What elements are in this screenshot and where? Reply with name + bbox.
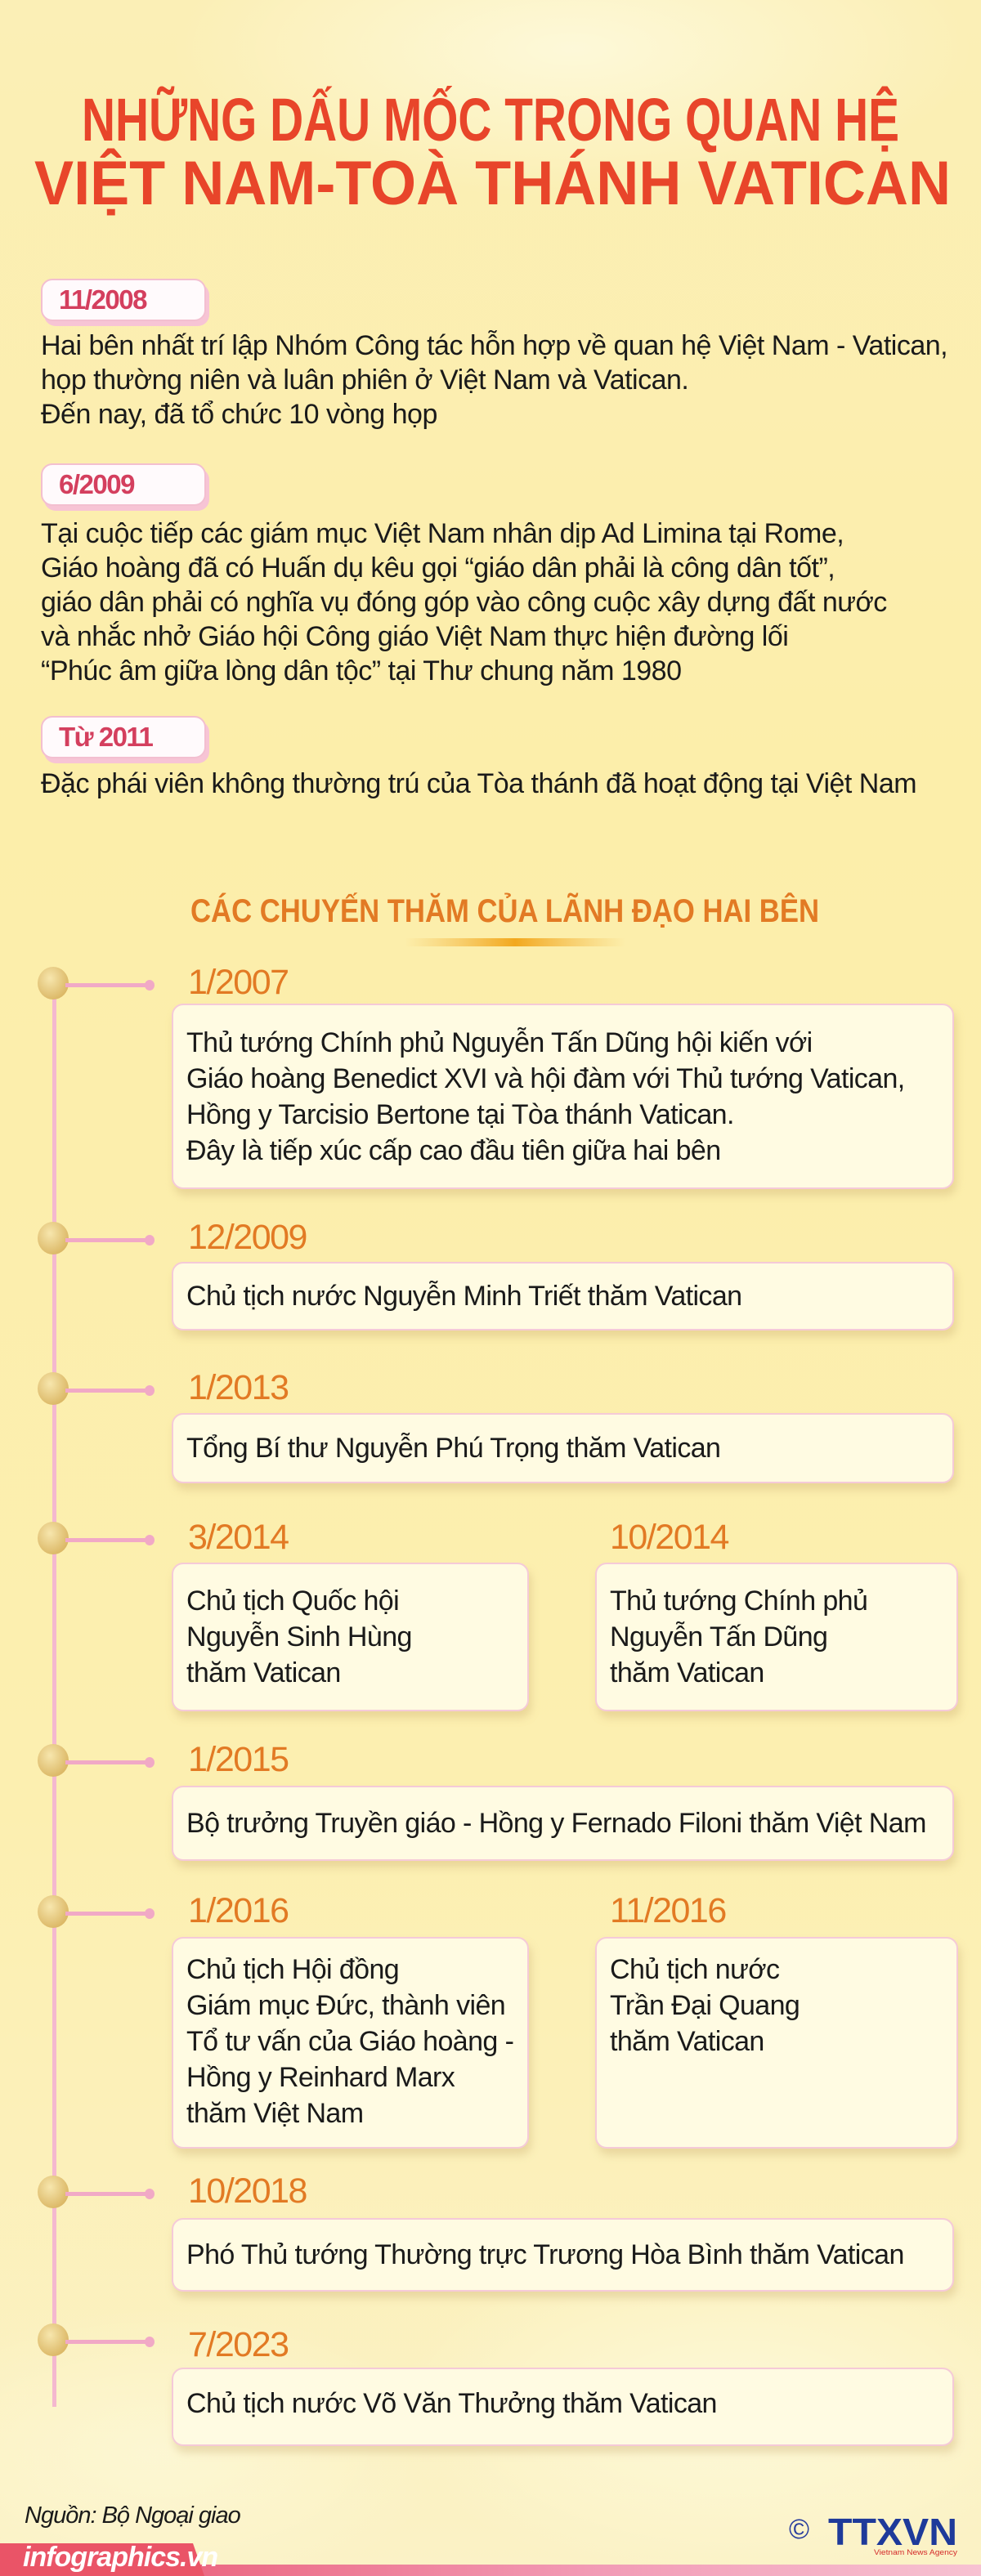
item: 7/2023: Chủ tịch nước Võ Văn Thưởng thăm Vatican [186,2388,717,2419]
item: 1/2007 [38,963,958,1198]
item: 7/2023: 7/2023 [188,2325,289,2364]
heading: visits: CÁC CHUYẾN THĂM CỦA LÃNH ĐẠO HAI BÊN [190,892,819,929]
timeline line [52,985,56,2407]
item: 1/2016 and 11/2016: Giám mục Đức, thành viên [186,1990,505,2021]
text: 11/2008 [41,330,947,430]
text: 6/2009: giáo dân phải có nghĩa vụ đóng góp vào công cuộc xây dựng đất nước [41,587,887,618]
item: 12/2009 [38,1218,958,1339]
text: 11/2008: Hai bên nhất trí lập Nhóm Công tác hỗn hợp về quan hệ Việt Nam - Vatican, [41,330,947,361]
pill: 6/2009: 6/2009 [59,469,134,499]
item: 1/2015: Bộ trưởng Truyền giáo - Hồng y Fernado Filoni thăm Việt Nam [186,1808,926,1839]
item: 10/2018: 10/2018 [188,2171,307,2211]
item: 3/2014 and 10/2014: Thủ tướng Chính phủ [610,1585,867,1617]
text: 11/2008: họp thường niên và luân phiên ở Việt Nam và Vatican. [41,364,688,396]
item: 3/2014 and 10/2014: Nguyễn Sinh Hùng [186,1621,412,1652]
item: 1/2015 [38,1740,958,1870]
item: 1/2007: Đây là tiếp xúc cấp cao đầu tiên giữa hai bên [186,1134,721,1165]
item: 1/2007: Thủ tướng Chính phủ Nguyễn Tấn Dũng hội kiến với [186,1026,813,1058]
item: 3/2014 and 10/2014: 3/2014 [188,1518,289,1557]
item: 7/2023 [38,2323,960,2456]
source: Nguồn: Bộ Ngoại giao [25,2502,240,2529]
text: 6/2009: “Phúc âm giữa lòng dân tộc” tại Thư chung năm 1980 [41,655,681,686]
item: 1/2007: Hồng y Tarcisio Bertone tại Tòa thánh Vatican. [186,1098,734,1129]
item: 1/2016 and 11/2016: 1/2016 [188,1891,289,1930]
item: 1/2016 and 11/2016: thăm Việt Nam [186,2098,363,2129]
logo: TTXVN: © [789,2514,809,2545]
pill: Từ 2011 [41,716,206,758]
item: 12/2009: 12/2009 [188,1218,307,1257]
title [34,86,951,218]
pill: 6/2009 [41,463,206,506]
item: 3/2014 and 10/2014: thăm Vatican [610,1657,764,1688]
text: 6/2009 [41,518,887,686]
item: 1/2013: Tổng Bí thư Nguyễn Phú Trọng thăm Vatican [186,1433,720,1464]
item: 1/2013 [38,1368,958,1492]
text: 6/2009: Giáo hoàng đã có Huấn dụ kêu gọi “giáo dân phải là công dân tốt”, [41,552,835,584]
item: 1/2007: Giáo hoàng Benedict XVI và hội đàm với Thủ tướng Vatican, [186,1062,905,1093]
item: 1/2016 and 11/2016 [38,1891,963,2158]
item: 12/2009: Chủ tịch nước Nguyễn Minh Triết thăm Vatican [186,1281,741,1312]
text: 11/2008: Đến nay, đã tổ chức 10 vòng họp [41,399,437,430]
item: 1/2016 and 11/2016: Chủ tịch Hội đồng [186,1954,399,1985]
text: 6/2009: và nhắc nhở Giáo hội Công giáo Việt Nam thực hiện đường lối [41,621,788,652]
item: 3/2014 and 10/2014: Chủ tịch Quốc hội [186,1585,399,1617]
item: 10/2018 [38,2171,959,2301]
item: 3/2014 and 10/2014 [38,1518,963,1720]
item: 1/2016 and 11/2016: Trần Đại Quang [610,1990,800,2021]
pill: 11/2008: 11/2008 [59,284,146,315]
footer bar [0,2542,981,2576]
text: 6/2009: Tại cuộc tiếp các giám mục Việt Nam nhân dịp Ad Limina tại Rome, [41,518,844,549]
title: VIỆT NAM-TOÀ THÁNH VATICAN [34,148,951,218]
item: 3/2014 and 10/2014: Nguyễn Tấn Dũng [610,1621,827,1652]
item: 1/2013: 1/2013 [188,1368,289,1407]
item: 1/2016 and 11/2016: thăm Vatican [610,2026,764,2057]
item: 1/2016 and 11/2016: Chủ tịch nước [610,1954,779,1985]
item: 1/2016 and 11/2016: 11/2016 [610,1891,726,1930]
item: 10/2018: Phó Thủ tướng Thường trực Trương Hòa Bình thăm Vatican [186,2239,904,2270]
item: 3/2014 and 10/2014: thăm Vatican [186,1657,341,1688]
item: 1/2016 and 11/2016: Hồng y Reinhard Marx [186,2062,455,2093]
text: Từ 2011: Đặc phái viên không thường trú của Tòa thánh đã hoạt động tại Việt Nam [41,768,916,799]
item: 1/2007: 1/2007 [188,963,289,1002]
item: 3/2014 and 10/2014: 10/2014 [610,1518,728,1557]
item: 1/2015: 1/2015 [188,1740,289,1779]
pill: 11/2008 [41,279,206,321]
logo: TTXVN [789,2512,958,2556]
item: 1/2016 and 11/2016: Tổ tư vấn của Giáo hoàng - [186,2026,513,2057]
pill: Từ 2011: Từ 2011 [59,722,152,752]
heading: visits [190,892,819,946]
footer bar: infographics.vn [23,2542,217,2573]
logo: TTXVN: Vietnam News Agency [874,2548,958,2556]
